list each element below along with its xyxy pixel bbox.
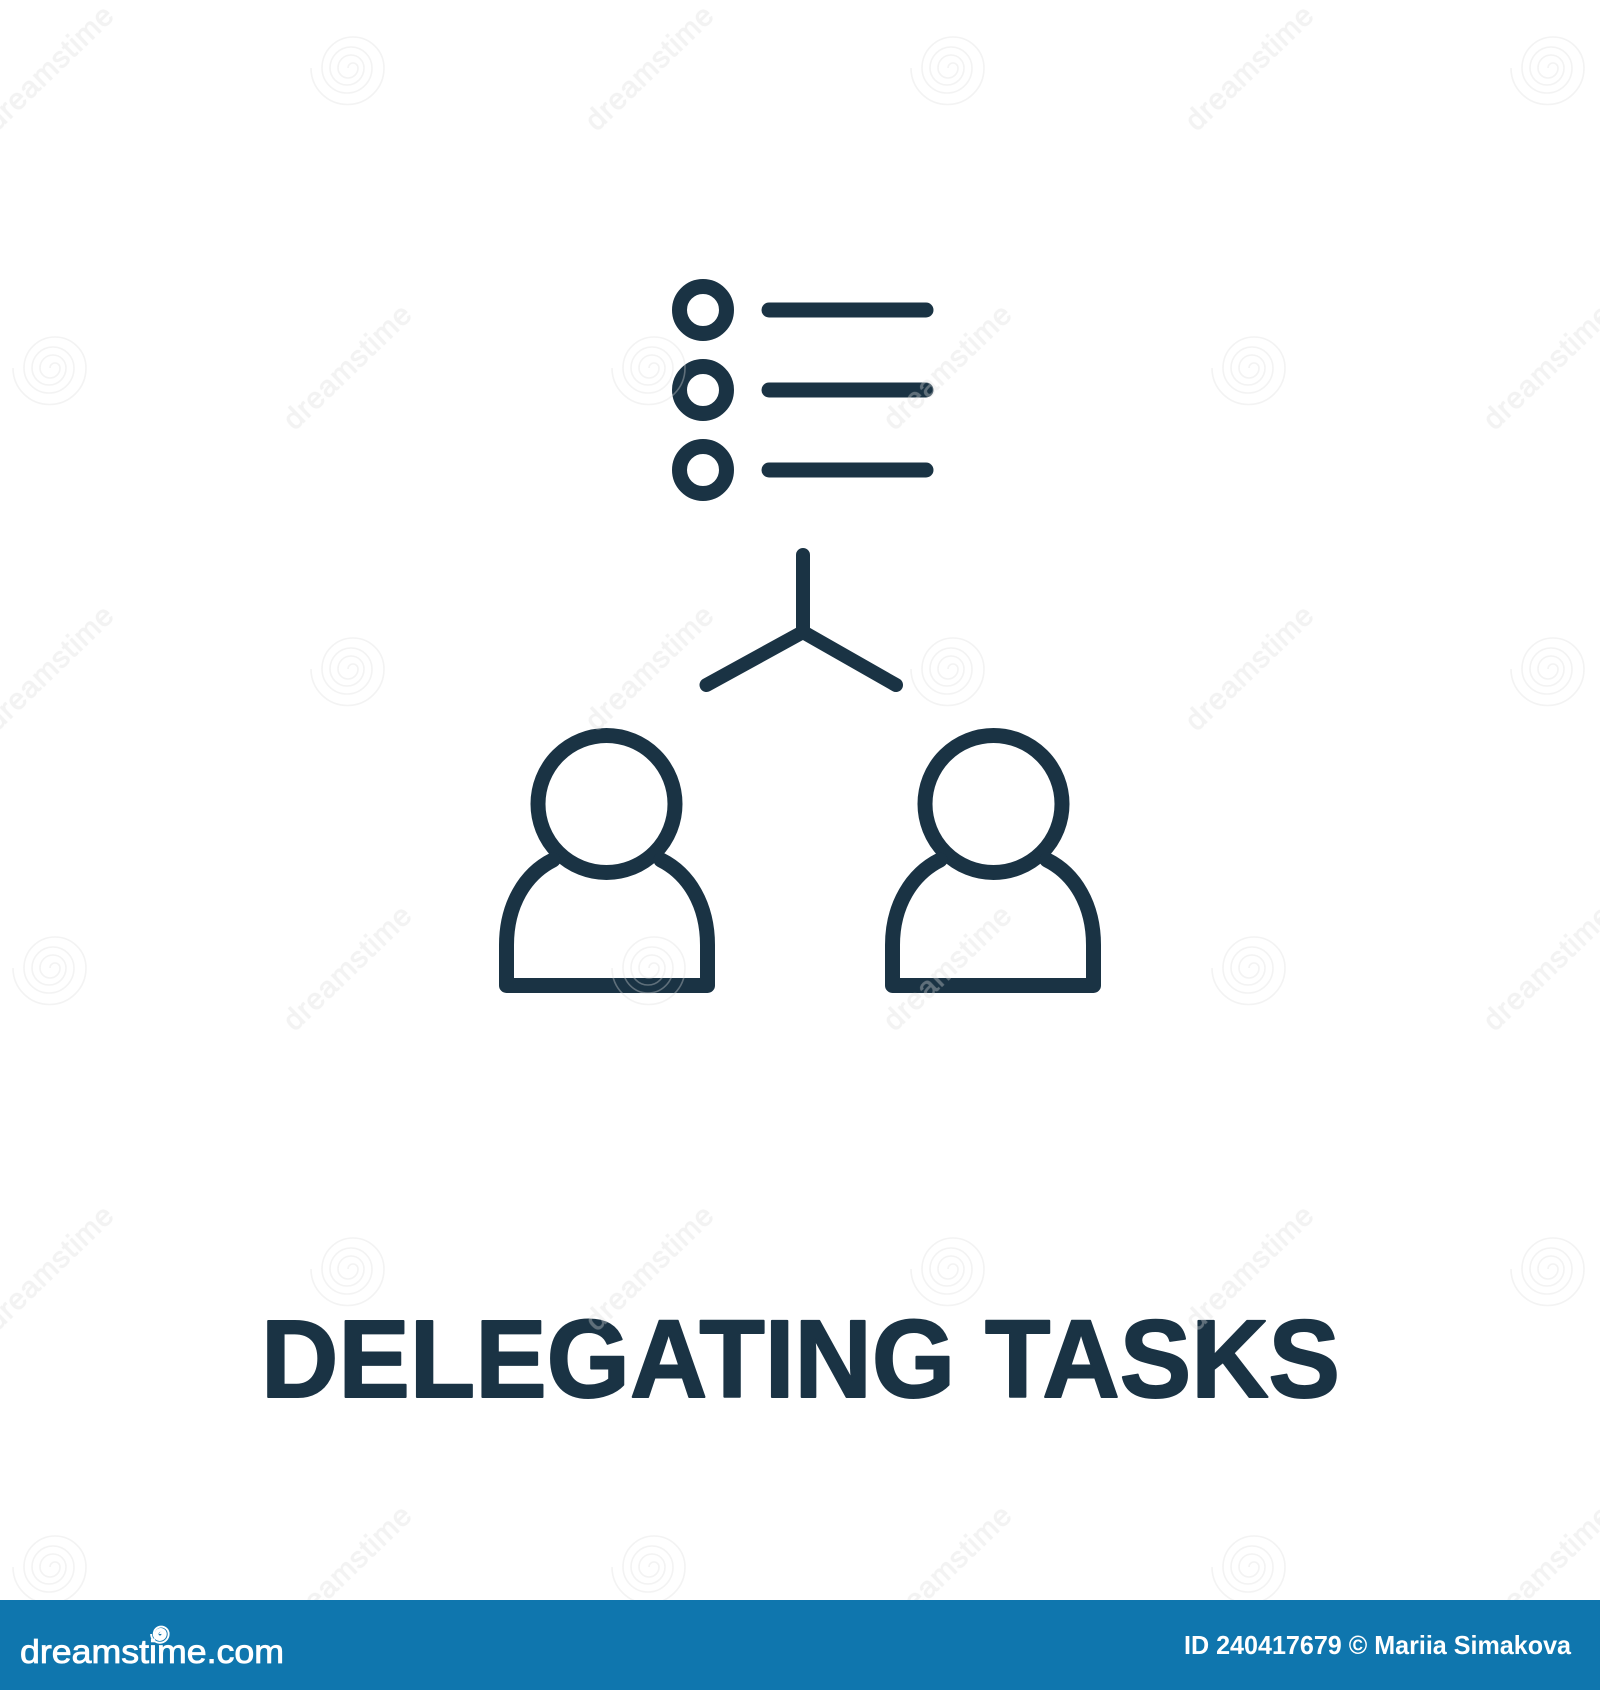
watermark pattern: dreamstime bbox=[877, 899, 1018, 1037]
icon: task list bbox=[680, 286, 926, 494]
watermark pattern: dreamstime bbox=[579, 0, 720, 137]
footer logo: dreamstime.com: dreamstime.com bbox=[20, 1633, 284, 1670]
watermark pattern: dreamstime bbox=[877, 298, 1018, 436]
watermark pattern: dreamstime bbox=[1179, 0, 1320, 137]
watermark pattern: dreamstime bbox=[277, 899, 418, 1037]
watermark pattern: dreamstime bbox=[579, 1199, 720, 1337]
title: DELEGATING TASKS bbox=[261, 1298, 1340, 1421]
watermark pattern: dreamstime bbox=[579, 599, 720, 737]
icon: branching arrow bbox=[706, 555, 896, 685]
footer bar bbox=[0, 1600, 1600, 1690]
icon: left person bbox=[506, 736, 708, 986]
icon: delegating tasks bbox=[506, 286, 1094, 986]
watermark pattern: dreamstime bbox=[1179, 1199, 1320, 1337]
watermark pattern: dreamstime bbox=[277, 1499, 418, 1637]
footer credit: ID 240417679 © Mariia Simakova bbox=[1184, 1630, 1572, 1660]
watermark pattern: dreamstime bbox=[877, 1499, 1018, 1637]
watermark pattern: dreamstime bbox=[277, 298, 418, 436]
icon: right person bbox=[892, 736, 1094, 986]
watermark pattern: dreamstime bbox=[1179, 599, 1320, 737]
